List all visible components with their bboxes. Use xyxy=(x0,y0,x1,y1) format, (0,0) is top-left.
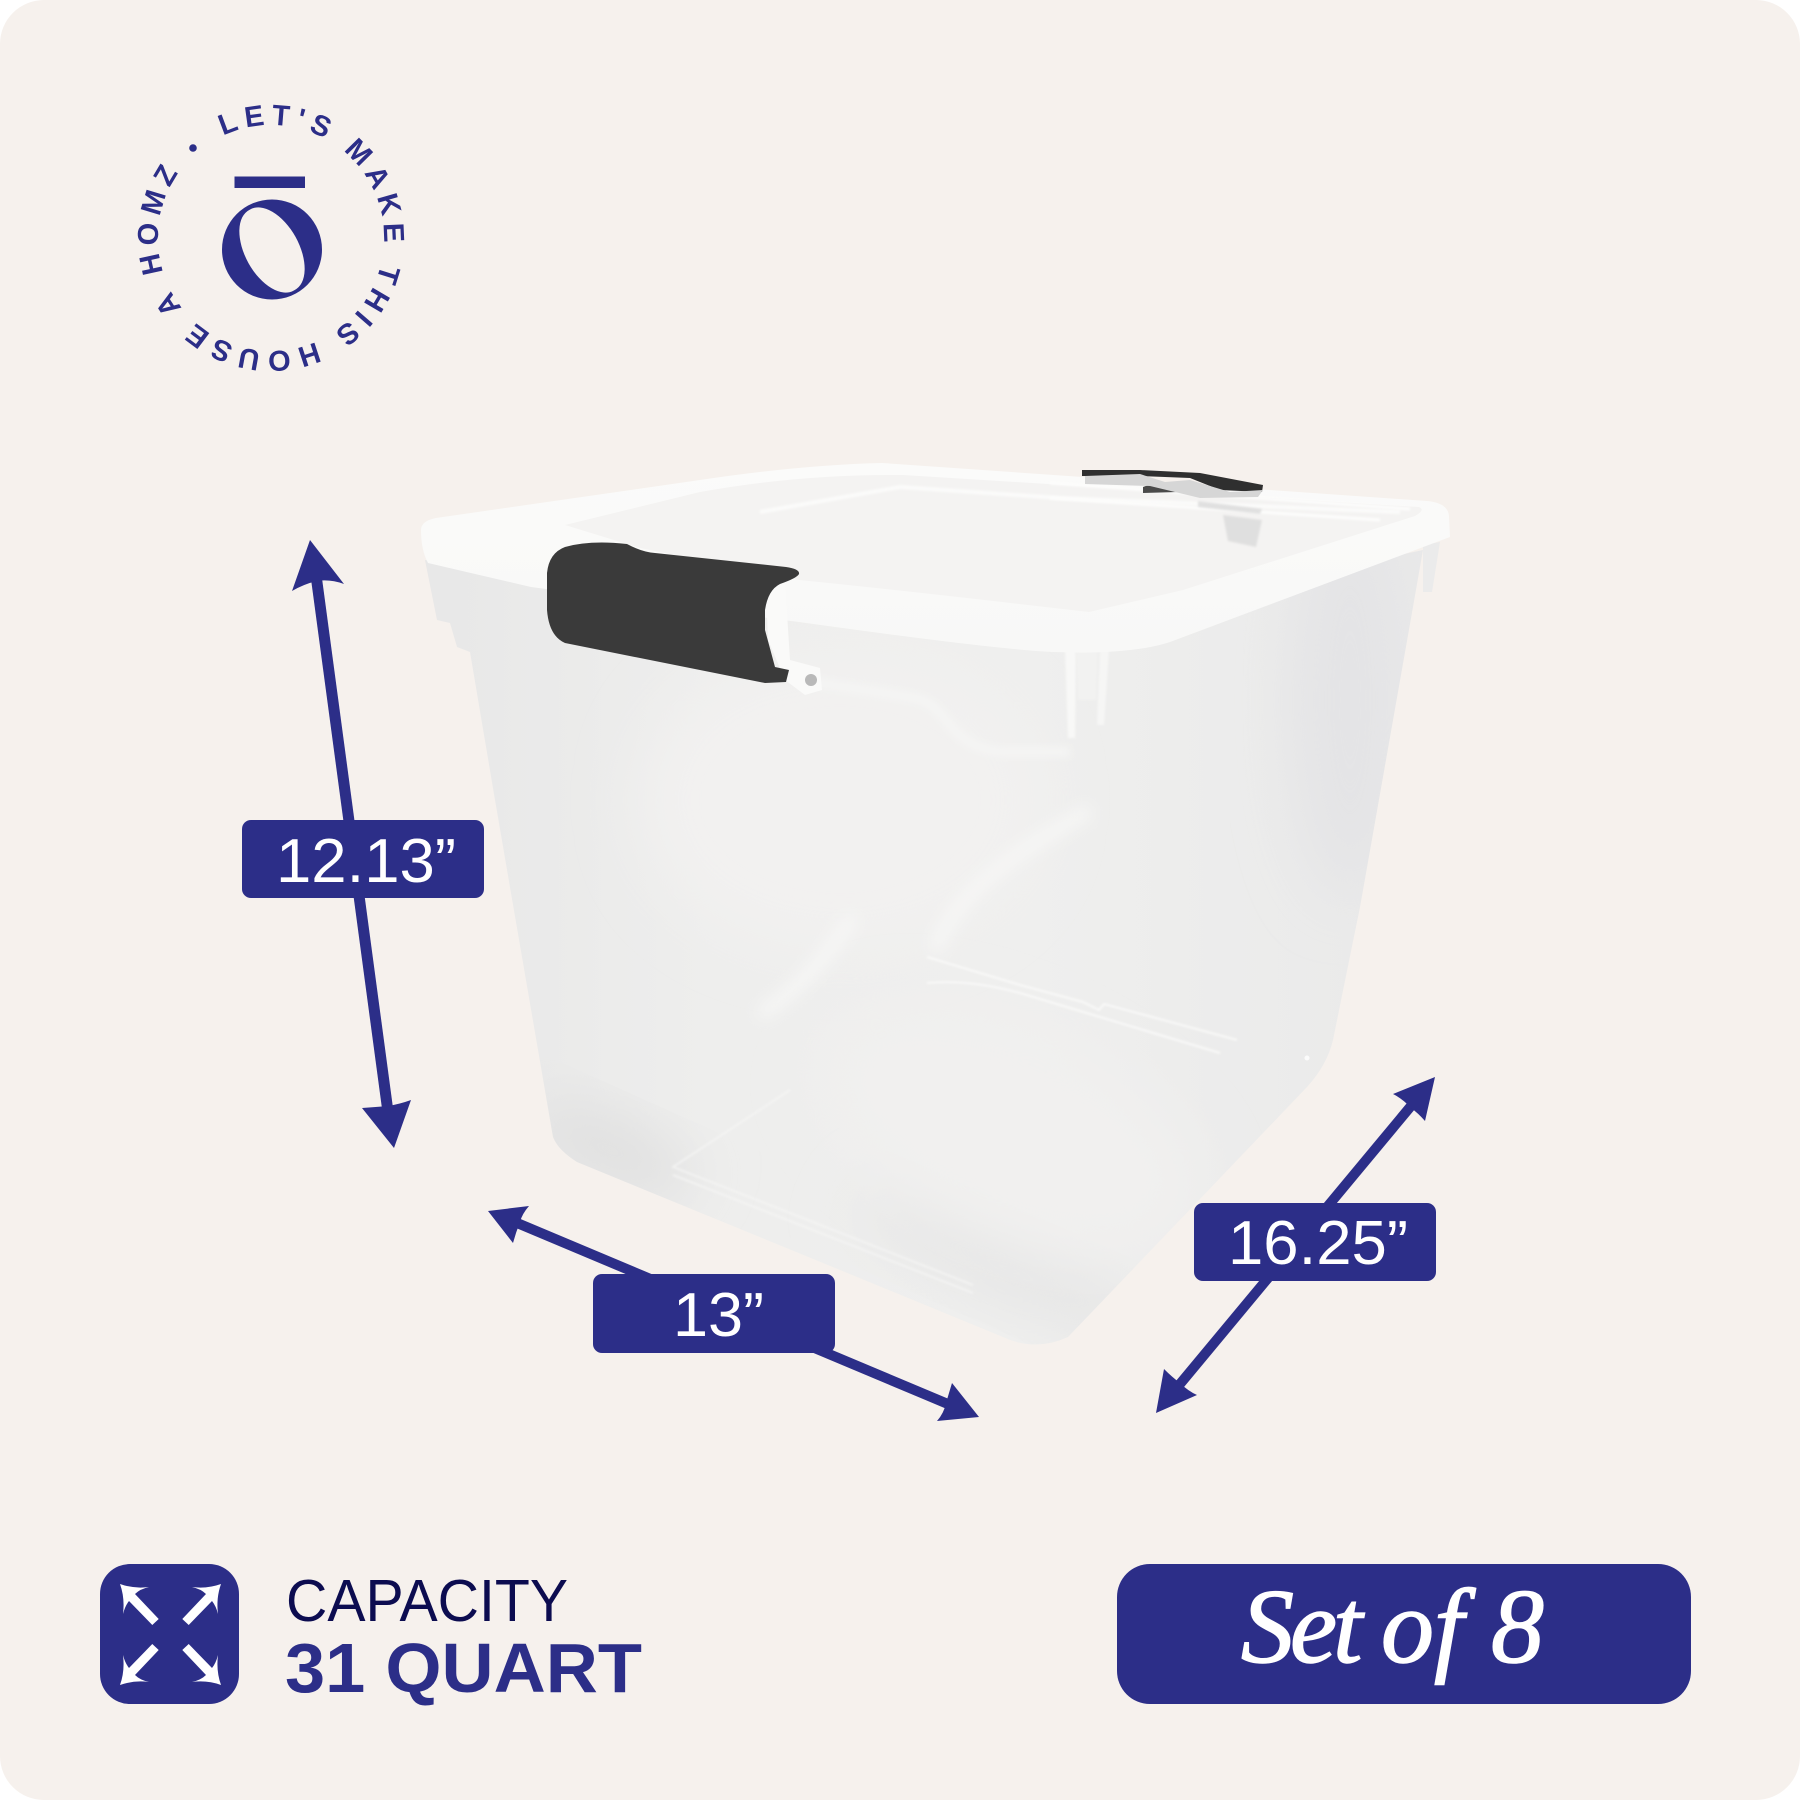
latch clamp xyxy=(547,543,799,683)
capacity heading: CAPACITY xyxy=(286,1568,568,1634)
logo badge xyxy=(138,104,404,371)
right side tab xyxy=(1423,542,1440,592)
set of 8 badge xyxy=(1117,1564,1691,1704)
depth label: 13” xyxy=(673,1281,764,1350)
lid inner panel xyxy=(565,475,1422,612)
capacity value: 31 QUART xyxy=(285,1629,642,1707)
front latch xyxy=(547,543,822,695)
bin body xyxy=(425,550,1423,1344)
logo macron bar xyxy=(234,176,305,188)
logo ring text: LET'S MAKE THIS HOUSE A HOMZ xyxy=(138,104,404,371)
storage bin illustration xyxy=(400,463,1450,1370)
width label: 16.25” xyxy=(1228,1209,1408,1278)
lid reflection xyxy=(1198,501,1262,547)
back latch metal part xyxy=(1085,474,1263,498)
height label: 12.13” xyxy=(276,827,456,896)
depth label xyxy=(593,1274,835,1353)
lid xyxy=(421,463,1450,653)
capacity icon xyxy=(100,1564,239,1704)
lid outline and rim xyxy=(421,463,1450,653)
depth arrow xyxy=(488,1206,979,1421)
latch bracket xyxy=(766,582,822,695)
back latch handle xyxy=(1082,470,1263,498)
set of 8 badge: 8 xyxy=(1491,1568,1544,1685)
icon arrows xyxy=(120,1584,221,1685)
latch bolt xyxy=(805,674,817,686)
height label xyxy=(242,820,484,898)
logo letter o xyxy=(222,199,322,300)
height arrow xyxy=(292,540,411,1148)
back latch dark part xyxy=(1082,470,1263,492)
set of 8 badge: Set xyxy=(1241,1568,1365,1685)
set of 8 badge: of xyxy=(1381,1568,1476,1685)
width arrow xyxy=(1156,1077,1435,1413)
width label xyxy=(1194,1203,1436,1281)
logo ring dot xyxy=(189,144,197,152)
